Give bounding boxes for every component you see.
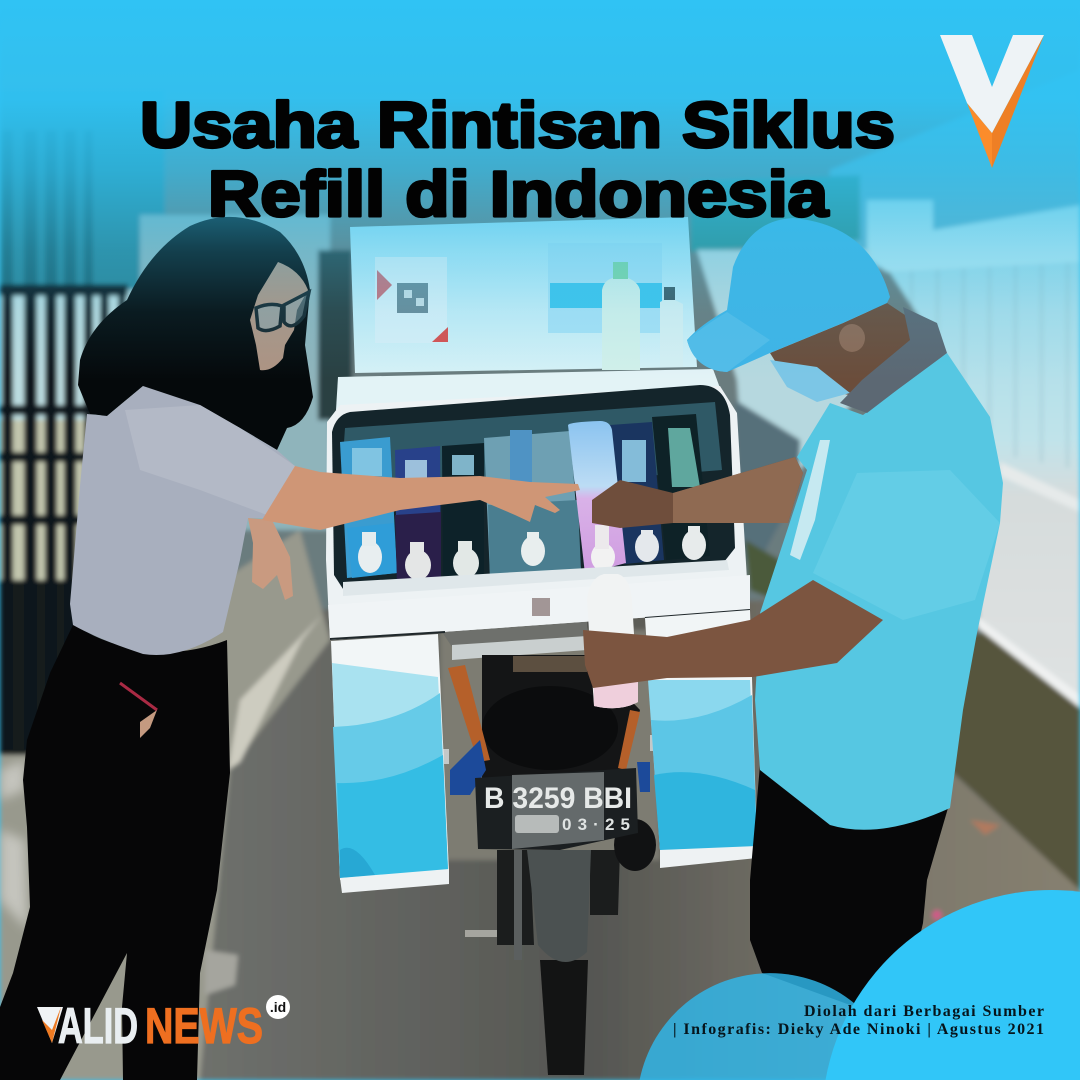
cart lid rim [336, 369, 720, 410]
face mask [770, 360, 850, 402]
curb [228, 615, 322, 770]
rear wheel [540, 960, 588, 1075]
left pavement [0, 530, 330, 1080]
id badge [266, 995, 290, 1019]
pocket stripe [120, 683, 157, 710]
bottle 4: wide clear [484, 430, 581, 577]
cap [687, 218, 890, 372]
cart body [326, 386, 750, 640]
dark path behind cart [735, 400, 800, 560]
cap brim highlight [687, 312, 770, 372]
wall stripes [887, 248, 1080, 470]
white railing [867, 200, 1080, 272]
exhaust [614, 819, 656, 871]
side frame [497, 850, 534, 945]
pavement white patches [0, 760, 28, 930]
hinges [427, 749, 449, 764]
door seams [330, 610, 750, 639]
logo: VALIDNEWS.id: NEWS [145, 998, 263, 1054]
tail blob [482, 686, 618, 770]
phone in pocket [140, 710, 157, 738]
green weed [745, 540, 780, 600]
cart upper back board [350, 217, 697, 373]
bottle 6: navy [610, 422, 664, 564]
compartment [332, 385, 735, 592]
poster on board [548, 243, 662, 333]
footer blob: small translucent [640, 973, 900, 1080]
wall base [975, 615, 1080, 708]
cart front ledge [343, 560, 729, 596]
white bottles on top [602, 262, 683, 370]
verge leaf [970, 820, 1000, 835]
right wall [887, 248, 1080, 705]
woman legs: black pants [0, 625, 230, 1080]
bottles in compartment [340, 414, 710, 582]
chain [514, 850, 522, 960]
ground under cart [440, 630, 660, 860]
white refill bottle [587, 574, 638, 708]
side panel left [331, 634, 449, 893]
left lower arm [248, 518, 293, 600]
outstretched arm [262, 466, 580, 530]
wall behind woman [140, 215, 330, 530]
bottle 2: navy purple [395, 446, 441, 582]
road light patch [205, 950, 238, 995]
plate reflection [512, 772, 604, 849]
upper arm and hand [592, 457, 803, 528]
dark interior [482, 655, 640, 790]
area behind man [697, 250, 870, 560]
bottle 5: pink refill [568, 421, 626, 574]
footrest [465, 930, 497, 937]
face [250, 262, 308, 370]
rack [442, 620, 587, 647]
blue parts [450, 740, 650, 795]
compartment inner glow [340, 402, 722, 500]
shirt sleeve highlight [125, 405, 295, 518]
logo: VALIDNEWS.id: ALID [58, 998, 138, 1054]
title [140, 89, 895, 230]
cart lower front [328, 575, 750, 640]
lower arm [583, 580, 883, 688]
bottle 7: dark green [652, 414, 710, 560]
face and neck [770, 303, 917, 395]
bottle 3: dark [442, 443, 484, 579]
woman [0, 217, 580, 1080]
license plate: B 3259 BBI [484, 782, 632, 815]
footer blob: large cyan [826, 890, 1080, 1080]
title: Usaha Rintisan Siklus [140, 89, 895, 161]
road surface [190, 600, 1080, 1080]
grey shirt [70, 386, 295, 655]
logo V mark small [37, 1007, 63, 1043]
left iron fence [0, 90, 165, 755]
source credit: | Infografis: Dieky Ade Ninoki | Agustus 2021 [673, 1021, 1044, 1038]
lower bars [2, 290, 126, 750]
shirt print [790, 440, 830, 560]
hair [78, 217, 313, 450]
title: Refill di Indonesia [208, 158, 828, 230]
cart [326, 217, 757, 893]
orange straps [448, 665, 640, 770]
seat box tan [513, 656, 587, 672]
man [583, 218, 1003, 1005]
source credit: Diolah dari Berbagai Sumber [804, 1003, 1044, 1020]
glasses [256, 292, 309, 331]
hazy building top right [830, 70, 1080, 270]
pink litter [932, 910, 942, 920]
side panel right [645, 610, 757, 868]
bush behind cart [690, 175, 860, 252]
shirt sleeve [813, 470, 1000, 620]
right dirt verge [950, 632, 1080, 890]
sticker with QR [375, 257, 448, 343]
license plate: 03·25 [562, 815, 630, 834]
mudguard [527, 850, 591, 962]
wall rail [1000, 462, 1080, 512]
forearm lighter [673, 457, 803, 523]
ear [839, 324, 865, 352]
bottle 1: blue [340, 437, 397, 578]
dark post left of cart [318, 250, 352, 420]
latch [532, 598, 550, 616]
man pants [750, 765, 948, 1005]
license plate [475, 768, 638, 850]
neck gaiter [840, 307, 947, 413]
logo: VALIDNEWS.id [37, 995, 290, 1054]
logo: V mark [940, 35, 1044, 168]
id badge: .id [270, 999, 286, 1015]
upper bars [2, 130, 93, 290]
cyan t-shirt [755, 353, 1003, 830]
gradient overlay fading the top of the photo [0, 0, 1080, 380]
source credit [673, 1003, 1044, 1038]
motorcycle [427, 620, 668, 1075]
